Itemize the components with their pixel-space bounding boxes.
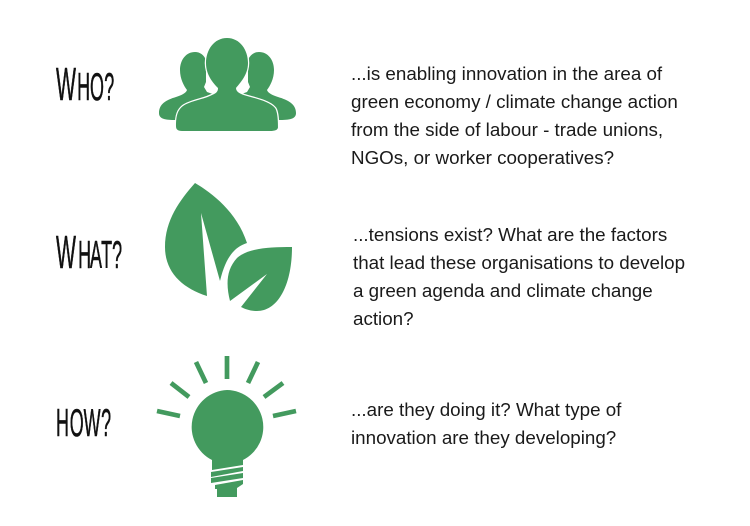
text: who description <box>351 63 678 168</box>
text: who description: green economy / climate change action <box>351 91 678 112</box>
text: how description <box>351 399 622 448</box>
text: how description: ...are they doing it? What type of <box>351 399 622 420</box>
text: what description: action? <box>353 308 414 329</box>
bulb <box>192 390 263 470</box>
text: how description: innovation are they developing? <box>351 427 616 448</box>
person right <box>225 52 296 120</box>
small leaf <box>228 247 292 311</box>
heading: What? <box>56 227 122 278</box>
text: what description: that lead these organisations to develop <box>353 252 685 273</box>
heading: Who?: HO? <box>77 67 114 109</box>
text: what description: ...tensions exist? What are the factors <box>353 224 667 245</box>
icon: two leaves <box>165 183 292 311</box>
text: who description: from the side of labour - trade unions, <box>351 119 663 140</box>
icon: group of people <box>159 38 296 131</box>
large leaf <box>165 183 247 296</box>
heading: What?: HAT? <box>78 235 122 277</box>
text: what description: a green agenda and climate change <box>353 280 653 301</box>
text: who description: ...is enabling innovation in the area of <box>351 63 663 84</box>
heading: Who? <box>56 59 114 110</box>
light rays <box>157 356 296 416</box>
heading: How?: HOW? <box>56 403 111 445</box>
bulb screw base <box>211 467 243 497</box>
heading: Who?: W <box>56 59 76 110</box>
heading: What?: W <box>56 227 76 278</box>
text: who description: NGOs, or worker cooperatives? <box>351 147 614 168</box>
text: what description <box>353 224 685 329</box>
person centre <box>176 38 278 131</box>
person left <box>159 52 230 120</box>
icon: light bulb <box>157 356 296 497</box>
